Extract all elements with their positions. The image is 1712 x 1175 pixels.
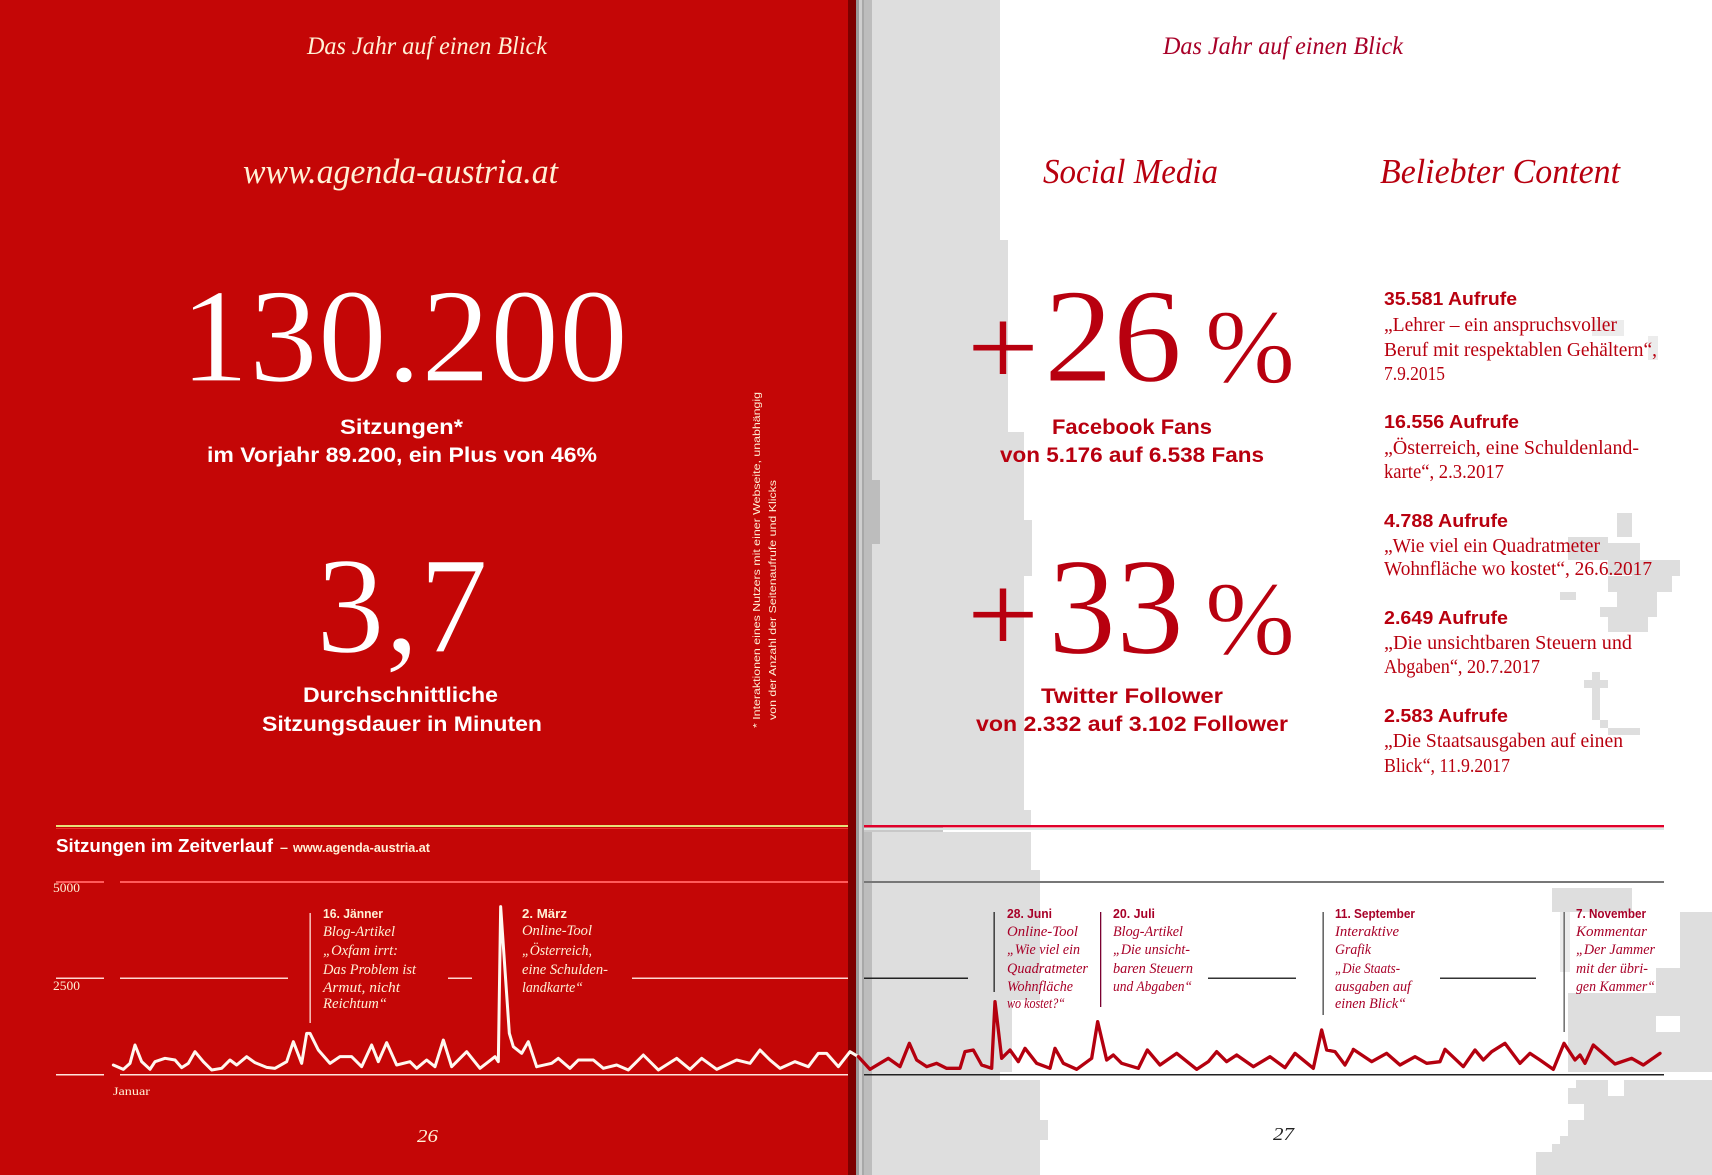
chart title — [56, 836, 431, 856]
duration caption: Durchschnittliche — [303, 683, 498, 707]
content item 3: „Wie viel ein Quadratmeter — [1384, 536, 1601, 557]
content item 2: 16.556 Aufrufe — [1384, 411, 1519, 432]
big number: sessions: 130.200 — [180, 262, 628, 410]
annotation: 2. März: Online-Tool — [522, 923, 592, 939]
panel: website statistics — [180, 152, 628, 736]
stat: facebook growth: 26 — [1044, 262, 1182, 410]
vertical footnote: * Interaktionen eines Nutzers mit einer Webseite, unabhängig — [752, 392, 763, 728]
facebook caption — [1000, 415, 1264, 467]
heading: popular content: Beliebter Content — [1380, 152, 1621, 191]
content item 4: 2.649 Aufrufe — [1384, 607, 1508, 628]
stat: twitter growth — [967, 530, 1295, 683]
axis labels: Januar — [113, 1084, 150, 1098]
duration caption — [262, 683, 542, 736]
annotation: 11. September: ausgaben auf — [1335, 979, 1413, 995]
content item 4: „Die unsichtbaren Steuern und — [1384, 633, 1632, 654]
running header left page: Das Jahr auf einen Blick — [306, 33, 548, 60]
axis labels — [53, 881, 150, 1098]
content item 1: 7.9.2015 — [1384, 364, 1445, 385]
twitter caption: Twitter Follower — [1041, 684, 1224, 708]
content item 5 — [1384, 705, 1623, 777]
twitter caption — [976, 684, 1289, 736]
content item 1: Beruf mit respektablen Gehältern“, — [1384, 340, 1657, 361]
annotation: 16. Jänner: Reichtum“ — [322, 996, 387, 1012]
chart title: – — [280, 840, 288, 855]
annotation: 11. September: 11. September — [1335, 907, 1415, 921]
annotation: 28. Juni: 28. Juni — [1007, 907, 1052, 921]
axis labels: 5000 — [53, 881, 80, 895]
content item 2: „Österreich, eine Schuldenland- — [1384, 438, 1639, 459]
page number 26: 26 — [417, 1126, 438, 1146]
big number: session duration: 3,7 — [316, 529, 488, 682]
annotation: 11. September: Interaktive — [1334, 924, 1399, 940]
vertical footnote: von der Anzahl der Seitenaufrufe und Klicks — [768, 480, 779, 720]
vertical footnote — [752, 392, 779, 728]
facebook caption: von 5.176 auf 6.538 Fans — [1000, 443, 1264, 467]
heading: website: www.agenda-austria.at — [243, 152, 559, 191]
stat: twitter growth: + — [967, 553, 1039, 677]
panel: popular content — [1380, 152, 1657, 777]
content item 1: 35.581 Aufrufe — [1384, 288, 1517, 309]
annotation: 16. Jänner: Das Problem ist — [322, 962, 417, 978]
content item 3: Wohnfläche wo kostet“, 26.6.2017 — [1384, 559, 1652, 580]
chart title: Sitzungen im Zeitverlauf — [56, 836, 274, 856]
annotation: 11. September: Grafik — [1335, 942, 1371, 958]
heading: social media: Social Media — [1043, 152, 1218, 191]
annotation: 2. März — [522, 907, 608, 996]
annotation: 11. September — [1322, 907, 1415, 1015]
annotation: 7. November: „Der Jammer — [1576, 942, 1655, 958]
running header right page: Das Jahr auf einen Blick — [1162, 33, 1404, 60]
annotation: 28. Juni: Quadratmeter — [1007, 961, 1088, 977]
annotation: 20. Juli — [1100, 907, 1193, 1007]
sessions caption — [207, 415, 597, 467]
page number 27: 27 — [1273, 1124, 1295, 1144]
annotation: 16. Jänner: Armut, nicht — [322, 980, 401, 996]
annotation: 28. Juni — [994, 907, 1088, 1012]
content item 1 — [1384, 288, 1657, 385]
annotation: 28. Juni: Online-Tool — [1007, 924, 1078, 940]
stat: facebook growth: % — [1205, 288, 1295, 405]
content item 2 — [1384, 411, 1639, 483]
annotation: 7. November: Kommentar — [1575, 924, 1647, 940]
stat: twitter growth: % — [1205, 560, 1295, 677]
sessions caption: Sitzungen* — [340, 415, 464, 439]
panel: social media — [967, 152, 1295, 736]
line chart: sessions per day — [113, 907, 1660, 1070]
stat: facebook growth — [967, 262, 1295, 410]
content item 4: Abgaben“, 20.7.2017 — [1384, 657, 1540, 678]
content item 1: „Lehrer – ein anspruchsvoller — [1384, 315, 1618, 336]
content item 5: „Die Staatsausgaben auf einen — [1384, 731, 1623, 752]
annotation: 2. März: landkarte“ — [522, 980, 583, 996]
annotation: 20. Juli: 20. Juli — [1113, 907, 1155, 921]
annotation: 16. Jänner — [310, 907, 417, 1023]
annotation: 7. November: mit der übri- — [1576, 961, 1648, 977]
annotation: 16. Jänner: 16. Jänner — [323, 907, 383, 921]
annotation: 20. Juli: und Abgaben“ — [1113, 979, 1192, 995]
annotation: 2. März: „Österreich, — [522, 942, 592, 959]
content item 3: 4.788 Aufrufe — [1384, 510, 1508, 531]
annotation: 20. Juli: baren Steuern — [1113, 961, 1193, 977]
annotation: 2. März: 2. März — [522, 907, 567, 921]
content item 2: karte“, 2.3.2017 — [1384, 462, 1504, 483]
annotation: 20. Juli: Blog-Artikel — [1113, 924, 1183, 940]
panel: sessions over time — [53, 825, 1664, 1098]
annotation: 16. Jänner: „Oxfam irrt: — [323, 943, 398, 959]
annotation: 11. September: „Die Staats- — [1335, 961, 1400, 977]
stat: facebook growth: + — [967, 286, 1039, 410]
content item 5: 2.583 Aufrufe — [1384, 705, 1508, 726]
content item 5: Blick“, 11.9.2017 — [1384, 756, 1510, 777]
chart title: www.agenda-austria.at — [292, 841, 431, 855]
annotation: 7. November: 7. November — [1576, 907, 1646, 921]
stat: twitter growth: 33 — [1048, 530, 1184, 683]
annotation: 11. September: einen Blick“ — [1335, 996, 1406, 1012]
content item 4 — [1384, 607, 1632, 678]
annotation: 28. Juni: Wohnfläche — [1007, 979, 1073, 995]
duration caption: Sitzungsdauer in Minuten — [262, 712, 542, 736]
annotation: 2. März: eine Schulden- — [522, 962, 608, 978]
facebook caption: Facebook Fans — [1052, 415, 1212, 439]
twitter caption: von 2.332 auf 3.102 Follower — [976, 712, 1289, 736]
annotation: 7. November — [1564, 907, 1655, 1032]
sessions caption: im Vorjahr 89.200, ein Plus von 46% — [207, 443, 597, 467]
annotation: 20. Juli: „Die unsicht- — [1113, 942, 1190, 958]
axis labels: 2500 — [53, 979, 80, 993]
content item 3 — [1384, 510, 1652, 580]
annotation: 7. November: gen Kammer“ — [1576, 979, 1655, 995]
annotation: 16. Jänner: Blog-Artikel — [323, 924, 395, 940]
annotation: 28. Juni: „Wie viel ein — [1007, 942, 1080, 958]
annotation: 28. Juni: wo kostet?“ — [1007, 996, 1065, 1012]
